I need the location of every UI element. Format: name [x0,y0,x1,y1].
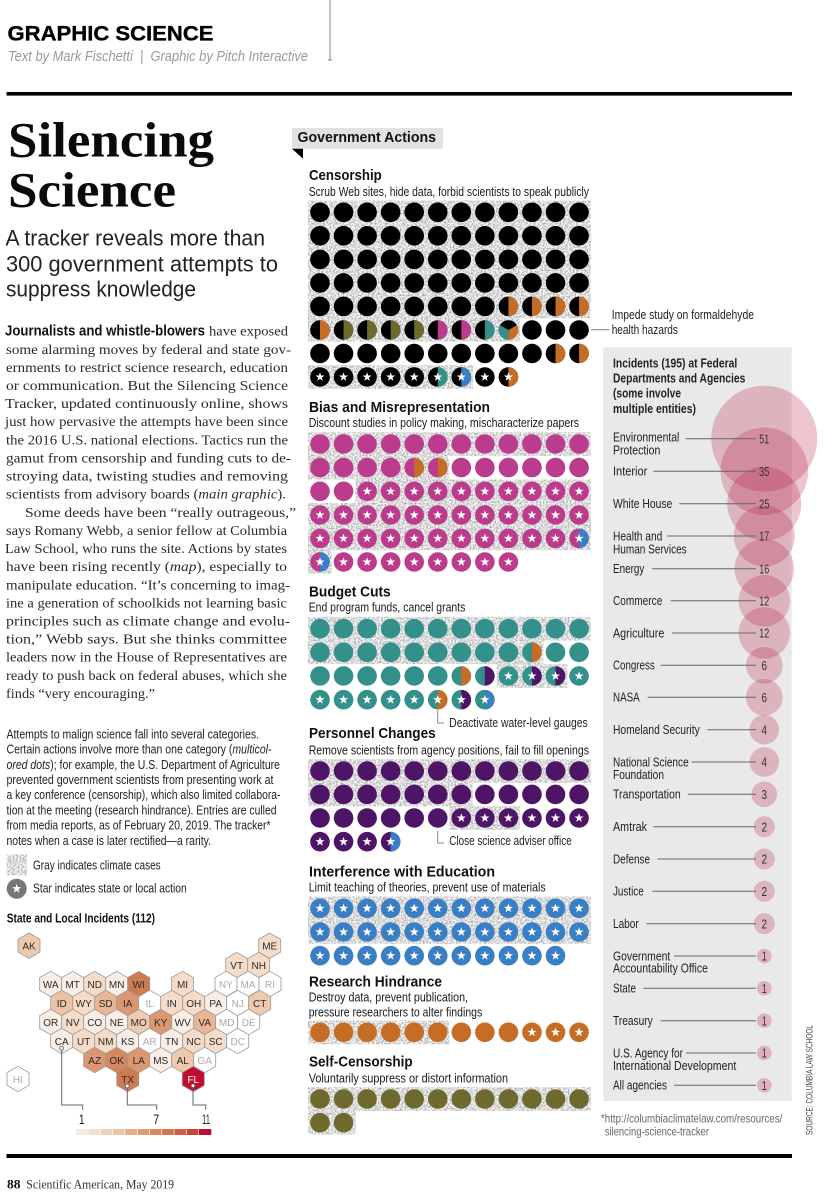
agency: Energy: 16 [759,561,769,576]
state labels: HI [13,1075,23,1086]
state labels: AZ [88,1056,101,1067]
state labels: MO [131,1018,147,1029]
state labels: CA [55,1037,69,1048]
agency: All agencies: 1 [762,1078,767,1093]
state labels: WV [175,1018,191,1029]
state labels: NY [219,980,233,991]
state labels: TX [121,1075,134,1086]
agency: Justice [613,884,767,899]
hexagon map: state and local incidents [7,911,281,1135]
heading: Research Hindrance [309,974,442,991]
agency: Health and Human Services: Human Services [613,542,687,556]
section label: Government Actions [292,128,443,159]
agency: Transportation: 3 [762,787,767,802]
heading: Self-Censorship [309,1054,413,1071]
description: Remove scientists from agency positions, fail to fill openings [309,742,589,757]
agency: Environmental Protection [613,431,769,457]
agency: Defense: Defense [613,852,650,866]
byline: Text by Mark Fischetti | Graphic by Pitch Interactive [8,48,308,65]
state labels: ND [87,980,102,991]
footer: Scientific American, May 2019 [26,1177,174,1191]
agency: U.S. Agency for International Development: 1 [762,1046,767,1061]
agency: Homeland Security [613,722,767,737]
leader lines [643,439,756,1085]
scale numbers: 7 [153,1111,159,1127]
agency: Treasury [613,1013,767,1028]
legend: gray climate cases: Gray indicates climate cases [33,857,161,872]
state labels: MD [219,1018,234,1029]
state labels: RI [265,980,275,991]
body text: have exposed [209,325,288,340]
agency: NASA: 6 [762,690,767,705]
state hexagons [7,933,281,1092]
state labels: VT [230,961,243,972]
state labels: AR [143,1037,157,1048]
body text: Tracker, updated continuously online, shows [5,397,288,412]
description: Scrub Web sites, hide data, forbid scientists to speak publicly [309,184,589,199]
agency: State: State [613,982,636,996]
state labels: MT [65,980,80,991]
agency: NASA: NASA [613,691,640,705]
agency: White House: White House [613,497,672,511]
state labels: IA [123,999,133,1010]
dots [315,444,589,572]
scale leaders [60,1046,206,1110]
state labels: FL [187,1075,200,1086]
agency: Interior [613,464,770,479]
agency: Justice: 2 [762,884,767,899]
agency: Amtrak: 2 [762,819,767,834]
agency: Labor [613,916,767,931]
legend: star state or local: Star indicates state or local action [33,881,187,896]
panel heading [613,356,745,416]
body text: Law School, who runs the site. Actions by states [5,542,287,557]
body text: manipulate education. “It’s concerning to imag- [6,578,290,593]
body text: stroying data, twisting studies and removing [6,470,288,484]
agency: Health and Human Services: 17 [759,529,769,544]
state labels: PA [209,999,222,1010]
agency: All agencies [613,1078,767,1093]
body text: the 2016 U.S. national elections. Tactics run the [6,433,288,448]
state labels: DC [230,1037,245,1048]
heading: Interference with Education [309,864,495,881]
dots [315,904,584,960]
state labels: MS [153,1056,169,1067]
explanatory note: notes when a case is later rectified—a rarity. [6,833,211,848]
state labels: KS [121,1037,135,1048]
explanatory note: Attempts to malign science fall into several categories. [6,726,259,741]
section label: Government Actions: Government Actions [298,130,436,146]
agency: Environmental Protection: Environmental [613,431,679,445]
agency: Transportation [613,787,767,802]
scale numbers [79,1111,210,1127]
state labels: IL [146,999,154,1010]
agency: Health and Human Services: Health and [613,530,662,544]
body text: or communication. But the Silencing Science [6,379,288,394]
footer: 88 [7,1177,20,1191]
climate gray background [308,432,591,574]
agency: All agencies: All agencies [613,1079,667,1093]
agency: Government Accountability Office [613,949,767,976]
body text: gamut from censorship and funding cuts to de- [6,451,291,466]
body text: scientists from advisory boards ( main graphic ). [6,488,286,503]
state labels: CO [87,1018,102,1029]
subtitle: A tracker reveals more than [6,226,265,251]
agency: Environmental Protection: 51 [759,431,769,446]
panel: self-censorship [308,1054,591,1134]
climate gray background [308,896,591,944]
dots [320,1099,580,1123]
agency: Labor: Labor [613,917,639,931]
state labels: NV [66,1018,80,1029]
body text: principles such as climate change and evolu- [6,614,290,630]
state labels: KY [154,1018,168,1029]
state labels: UT [77,1037,90,1048]
agency: Amtrak: Amtrak [613,820,648,834]
footnote: silencing-science-tracker [605,1125,709,1139]
agency: Government Accountability Office: Government [613,949,671,963]
state labels: NE [110,1018,124,1029]
body text: Some deeds have been “really outrageous,” [25,506,296,521]
source credit: SOURCE: COLUMBIA LAW SCHOOL [805,1025,816,1135]
title: Silencing [8,112,214,168]
dots [315,771,584,852]
panel: censorship [308,167,591,389]
agency: Commerce: Commerce [613,594,662,608]
agency: Homeland Security: Homeland Security [613,723,700,737]
footnote [601,1112,783,1139]
agency: Defense: 2 [762,852,767,867]
agency: Justice: Justice [613,885,644,899]
explanatory note: prevented government scientists from presenting work at [6,772,274,787]
legend: star state or local [7,879,187,899]
state labels: ME [262,942,278,952]
agency: Congress [613,658,767,673]
proportional bubbles [711,386,817,1093]
body text: finds “very encouraging.” [6,687,155,702]
callout: formaldehyde: health hazards [612,323,678,337]
agency: Government Accountability Office: Accountability Office [613,962,708,976]
explanatory note: a key conference (censorship), which also limited collabora- [6,787,280,802]
state labels: OK [109,1056,124,1067]
body text: ine a generation of schoolkids not learning basic [6,596,287,611]
scale numbers: 1 [79,1111,85,1127]
agency: NASA [613,690,767,705]
state labels: MI [177,980,188,991]
state labels: TN [165,1037,178,1048]
explanatory note: ored dots); for example, the U.S. Department of Agriculture [6,757,280,772]
climate gray background [308,617,591,688]
heading: Bias and Misrepresentation [309,399,490,416]
state labels: ID [57,999,67,1010]
state labels: NJ [232,999,244,1010]
heading: Budget Cuts [309,584,391,601]
panel: research hindrance [308,974,584,1044]
agency: Congress: 6 [762,658,767,673]
description: Discount studies in policy making, mischaracterize papers [309,415,579,430]
body text: ernments to restrict science research, education [6,361,288,376]
body text: leaders now in the House of Representatives are [6,651,287,666]
state labels: GA [197,1056,212,1067]
panel heading: Incidents (195) at Federal [613,356,737,370]
agency: Energy: Energy [613,562,645,576]
description: End program funds, cancel grants [309,600,466,615]
agency: Amtrak [613,819,767,834]
state labels: OH [186,999,201,1010]
agency: Interior: 35 [759,464,770,479]
agency: Energy [613,561,769,576]
panel: budget cuts [308,584,591,730]
footnote: *http://columbiaclimatelaw.com/resources/ [601,1112,783,1126]
subtitle [6,226,278,302]
panel heading: Departments and Agencies [613,372,745,386]
panel: federal incidents bubble list [603,347,817,1101]
agency: Interior: Interior [613,464,647,478]
state labels: WY [76,999,92,1010]
dots [320,1028,584,1036]
agency: Government Accountability Office: 1 [762,949,767,964]
state labels: LA [133,1056,145,1067]
agency: Environmental Protection: Protection [613,443,660,457]
state labels: IN [167,999,177,1010]
title: Science [8,162,176,218]
agency: Defense [613,852,767,867]
panel background [603,347,792,1101]
agency: White House: 25 [759,496,770,511]
state labels: SD [99,999,113,1010]
callout: formaldehyde [591,308,754,337]
agency: National Science Foundation: Foundation [613,768,664,782]
agency: Treasury: 1 [762,1013,767,1028]
agency: Agriculture [613,626,769,641]
map heading: State and Local Incidents (112) [7,911,155,926]
climate gray background [308,1020,449,1044]
state labels: AK [22,942,36,952]
panel heading: (some involve [613,387,681,401]
panel heading: multiple entities) [613,402,696,416]
dots [315,212,589,387]
agency: U.S. Agency for International Development: U.S. Agency for [613,1046,683,1060]
agency: Agriculture: Agriculture [613,626,664,640]
agency: Health and Human Services [613,529,769,556]
agency: National Science Foundation: National Science [613,755,689,769]
explanatory note: from media reports, as of February 20, 2019. The tracker* [6,818,270,833]
heading: Censorship [309,167,382,184]
body text: have been rising recently ( map), especially to [6,560,287,575]
agency: Homeland Security: 4 [762,722,767,737]
state labels: MA [240,980,256,991]
callout: science adviser office: Close science adviser office [449,834,572,848]
explanatory note: Certain actions involve more than one category (multicol- [6,742,272,756]
panel: personnel changes [308,725,591,852]
title [8,112,214,218]
state labels: AL [177,1056,189,1067]
subtitle: 300 government attempts to [6,252,278,277]
agency: State: 1 [762,981,767,996]
agency: Agriculture: 12 [759,626,769,641]
callout: water-level gauges: Deactivate water-level gauges [449,716,588,730]
callout: science adviser office [438,831,572,848]
state labels: NM [98,1037,113,1048]
state labels: WA [43,980,59,991]
agency: White House [613,496,770,511]
climate gray background [308,759,591,830]
state labels [13,942,278,1086]
agency: Transportation: Transportation [613,788,681,802]
state labels: NH [251,961,266,972]
description: Limit teaching of theories, prevent use of materials [309,880,546,895]
body text: just how pervasive the attempts have been since [4,415,288,430]
panel: research hindrance: pressure researchers to alter findings [309,1005,483,1020]
climate gray background [308,1087,591,1134]
state labels: CT [253,999,266,1010]
callout: formaldehyde: Impede study on formaldehyde [612,308,754,322]
agency: U.S. Agency for International Development: International Development [613,1059,737,1073]
body text [4,324,296,702]
agency: Congress: Congress [613,659,655,673]
panel: bias and misrepresentation [308,399,591,574]
agency: Labor: 2 [762,916,767,931]
agency: Commerce [613,593,769,608]
agency: U.S. Agency for International Development [613,1046,767,1073]
state labels: VA [198,1018,211,1029]
body text: tion,” Webb says. But she thinks committee [6,633,287,648]
description: Voluntarily suppress or distort information [309,1070,508,1085]
body text: Journalists and whistle-blowers [5,324,205,340]
scale numbers: 11 [202,1111,210,1127]
state labels: WI [133,980,145,991]
department title: GRAPHIC SCIENCE [8,23,214,46]
climate gray background [308,200,591,389]
state labels: MN [109,980,124,991]
agency: State [613,981,767,996]
color scale [76,1129,211,1135]
panel: interference with education [308,864,591,960]
callout: water-level gauges [438,710,588,730]
explanatory note: tion at the meeting (research hindrance). Entries are culled [6,802,276,817]
state labels: SC [209,1037,223,1048]
dots [315,629,584,710]
state labels: NC [186,1037,201,1048]
state labels: DE [242,1018,256,1029]
subtitle: suppress knowledge [6,277,196,302]
description: Destroy data, prevent publication, [309,990,468,1005]
body text: says Romany Webb, a senior fellow at Columbia [6,524,288,539]
heading: Personnel Changes [309,725,436,742]
agency: Treasury: Treasury [613,1014,653,1028]
body text: some alarming moves by federal and state gov- [6,343,291,358]
legend: gray climate cases [7,854,161,875]
header: Graphic Science [8,23,308,65]
agency: National Science Foundation: 4 [762,755,767,770]
explanatory note [6,726,280,848]
body text: ready to push back on federal abuses, which she [6,669,287,684]
agency: National Science Foundation [613,755,767,782]
state labels: OR [43,1018,58,1029]
agency: Commerce: 12 [759,593,769,608]
